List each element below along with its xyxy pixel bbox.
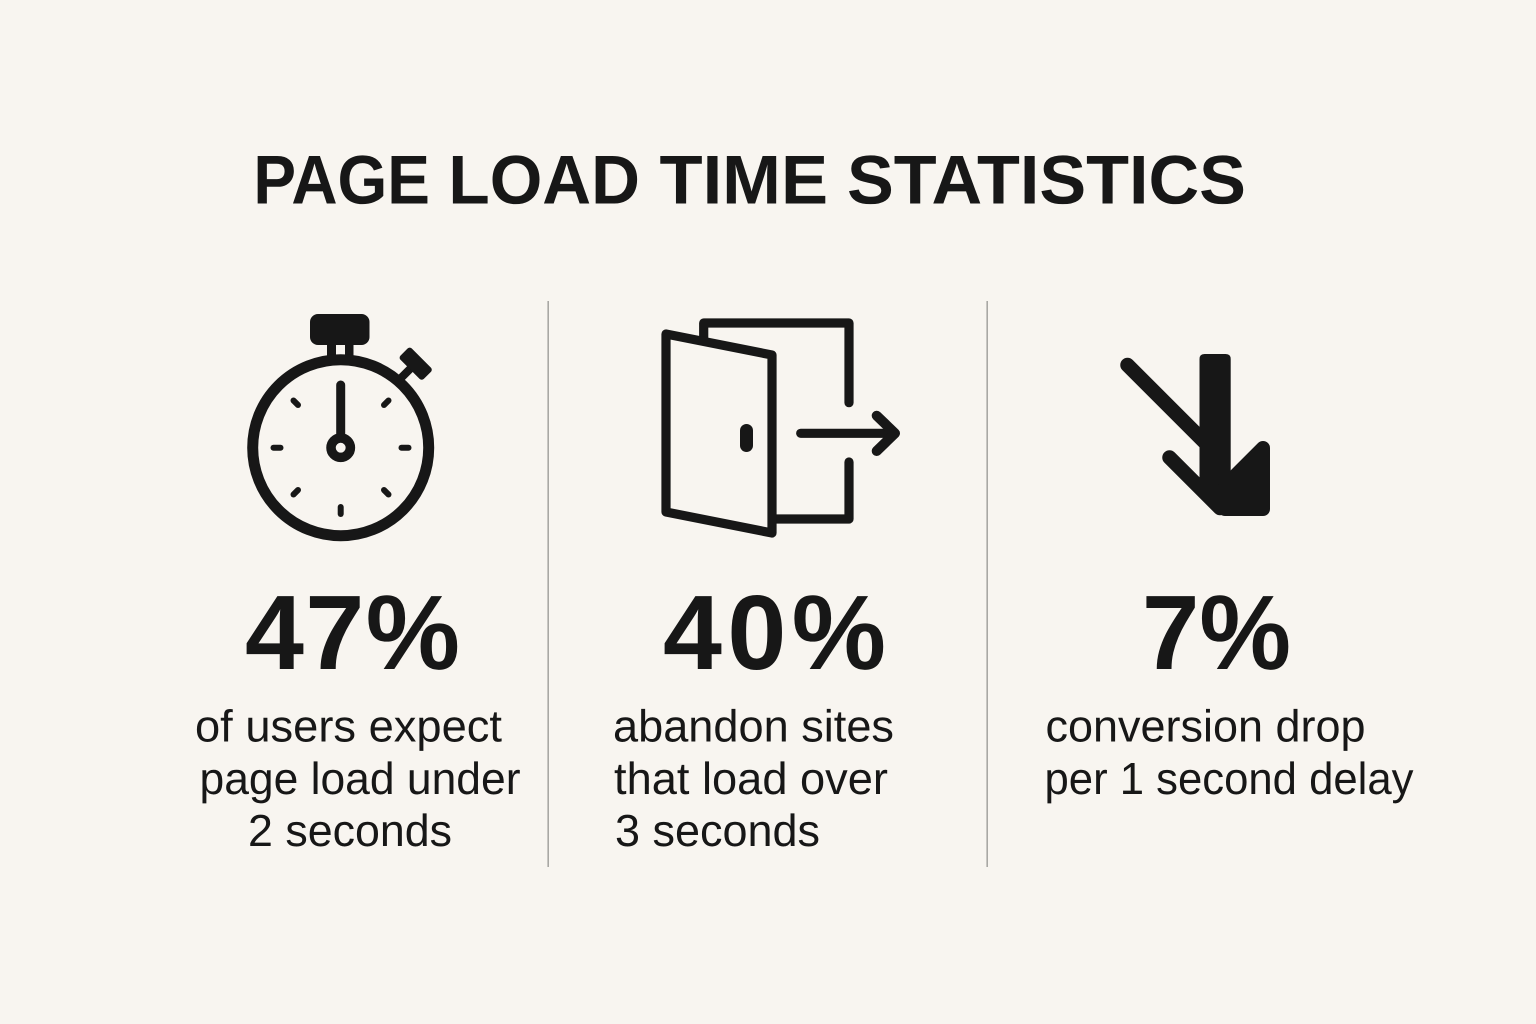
title: PAGE bbox=[253, 141, 430, 218]
description: conversion drop bbox=[1044, 701, 1414, 804]
icon: stopwatch bbox=[253, 314, 433, 536]
icon: door with exit arrow bbox=[666, 323, 895, 533]
panel: 47% users expect bbox=[195, 314, 521, 856]
statistic: 7%: 7% bbox=[1142, 574, 1291, 692]
title: TIME bbox=[660, 141, 828, 218]
description: users expect: 2 seconds bbox=[248, 805, 452, 856]
statistic: 47%: 47% bbox=[245, 574, 460, 692]
title bbox=[253, 141, 1246, 218]
panel: 7% conversion drop bbox=[1044, 354, 1414, 804]
description: abandon sites: that load over bbox=[614, 753, 888, 804]
description: conversion drop: per 1 second delay bbox=[1044, 753, 1414, 804]
title: STATISTICS bbox=[847, 141, 1246, 218]
description: conversion drop: conversion drop bbox=[1046, 701, 1366, 752]
statistic: 40%: 40% bbox=[663, 574, 886, 692]
description: users expect: page load under bbox=[200, 753, 521, 804]
title: LOAD bbox=[448, 141, 640, 218]
description: users expect: of users expect bbox=[195, 701, 503, 752]
description: abandon sites: abandon sites bbox=[613, 701, 894, 752]
icon: downward arrow bbox=[1128, 354, 1263, 509]
description: users expect bbox=[195, 701, 521, 856]
description: abandon sites: 3 seconds bbox=[615, 805, 820, 856]
panel: 40% abandon sites bbox=[613, 323, 895, 856]
description: abandon sites bbox=[613, 701, 894, 856]
